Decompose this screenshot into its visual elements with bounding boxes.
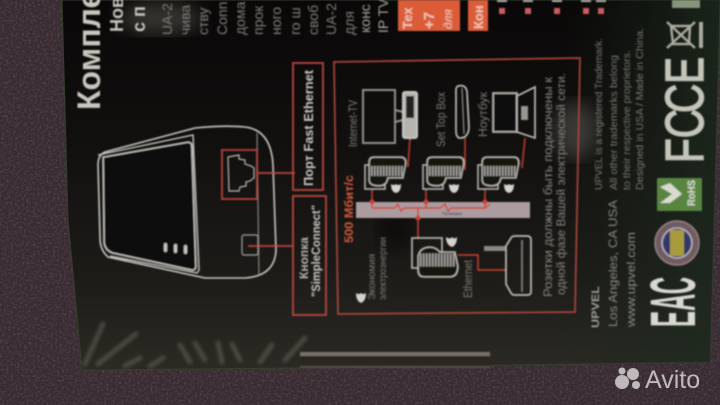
Ethernet port xyxy=(228,155,254,191)
wiring xyxy=(370,138,525,270)
icon: Internet-TV: Internet-TV xyxy=(348,100,360,147)
badge: RoHS: RoHS xyxy=(686,180,698,206)
icon: crossed-out bin xyxy=(667,22,703,48)
checklist bullets xyxy=(497,0,606,14)
contents callout: orange: Кон xyxy=(471,5,486,29)
icon: laptop xyxy=(478,87,535,138)
support callout: orange xyxy=(398,0,460,31)
badge: round hologram seal xyxy=(655,221,699,265)
address xyxy=(590,200,638,328)
icon: powerline adapter 3 xyxy=(478,157,519,193)
text: ЕАС xyxy=(637,277,709,327)
SimpleConnect button xyxy=(242,235,258,255)
subtitle xyxy=(107,0,149,32)
logo: CE: CE xyxy=(655,57,715,113)
logo: green corner mark xyxy=(672,0,700,8)
note: outlets: Розетки должны быть подключены к xyxy=(541,76,555,297)
body text column: ству xyxy=(195,7,211,35)
callout: Fast Ethernet port xyxy=(222,63,323,199)
address: www.upvel.com xyxy=(624,232,638,328)
callout: SimpleConnect button: "SimpleConnect" xyxy=(309,205,323,297)
icon: laptop: Ноутбук xyxy=(478,91,490,137)
label: Ethernet: Ethernet xyxy=(463,259,475,298)
panel: network diagram xyxy=(334,58,580,314)
address: UPVEL xyxy=(590,286,602,328)
body text column: Conn xyxy=(214,2,230,35)
body text column: для xyxy=(341,11,357,35)
body text column: чива xyxy=(177,5,193,35)
trademark text: Designed in USA / Made in China. xyxy=(634,28,646,190)
contents callout: orange xyxy=(468,0,488,31)
body text column: ного xyxy=(268,7,284,35)
support callout: orange: Тех xyxy=(400,7,415,29)
icon: powerline adapter 1 xyxy=(365,157,406,193)
power line bar xyxy=(356,202,530,218)
callout: SimpleConnect button xyxy=(248,196,326,315)
trademark text: All other trademarks belong xyxy=(608,55,620,190)
body text column: го ш xyxy=(287,7,303,35)
note: outlets xyxy=(541,73,568,297)
trademark text xyxy=(593,28,646,190)
watermark: Avito: Avito xyxy=(645,366,700,394)
subtitle: с п xyxy=(129,6,149,32)
body text column: UA-2 xyxy=(323,3,339,35)
speed label: 500 Мбит/с xyxy=(342,175,356,243)
callout: Fast Ethernet port: Порт Fast Ethernet xyxy=(301,69,316,186)
body text column: UA-2 xyxy=(159,3,175,35)
icon: Internet-TV xyxy=(348,90,417,147)
logo: FCC: FC xyxy=(655,109,715,163)
support callout: orange: +7 xyxy=(421,12,438,29)
watermark: Avito xyxy=(615,366,700,394)
icon: powerline adapter at wall xyxy=(412,237,458,277)
badge: RoHS xyxy=(657,178,702,211)
icon: router xyxy=(484,236,531,295)
icon: powerline adapter 2 xyxy=(423,157,464,193)
callout: SimpleConnect button: Кнопка xyxy=(297,237,311,279)
support callout: orange: для xyxy=(441,9,455,29)
trademark text: UPVEL is a registered Trademark. xyxy=(593,38,605,190)
note: outlets: одной фазе Вашей электрической сети. xyxy=(554,73,568,295)
power line bar: Проводка xyxy=(442,211,463,216)
device illustration xyxy=(98,126,276,278)
body text column: прок xyxy=(250,5,266,35)
body text column: своб xyxy=(305,5,321,35)
address: Los Angeles, CA USA xyxy=(606,200,620,327)
energy saving legend xyxy=(356,237,389,303)
LED indicators xyxy=(164,243,187,254)
body text column xyxy=(159,0,391,35)
body text column: дома xyxy=(232,1,248,35)
energy saving legend: электроэнергии xyxy=(378,237,389,300)
icon: Set Top Box: Set Top Box xyxy=(436,92,448,147)
body text column: конс xyxy=(357,4,373,33)
energy saving legend: Экономия xyxy=(367,254,378,300)
icon: Set Top Box xyxy=(436,86,469,147)
trademark text: to their respective proprietors. xyxy=(621,50,633,190)
